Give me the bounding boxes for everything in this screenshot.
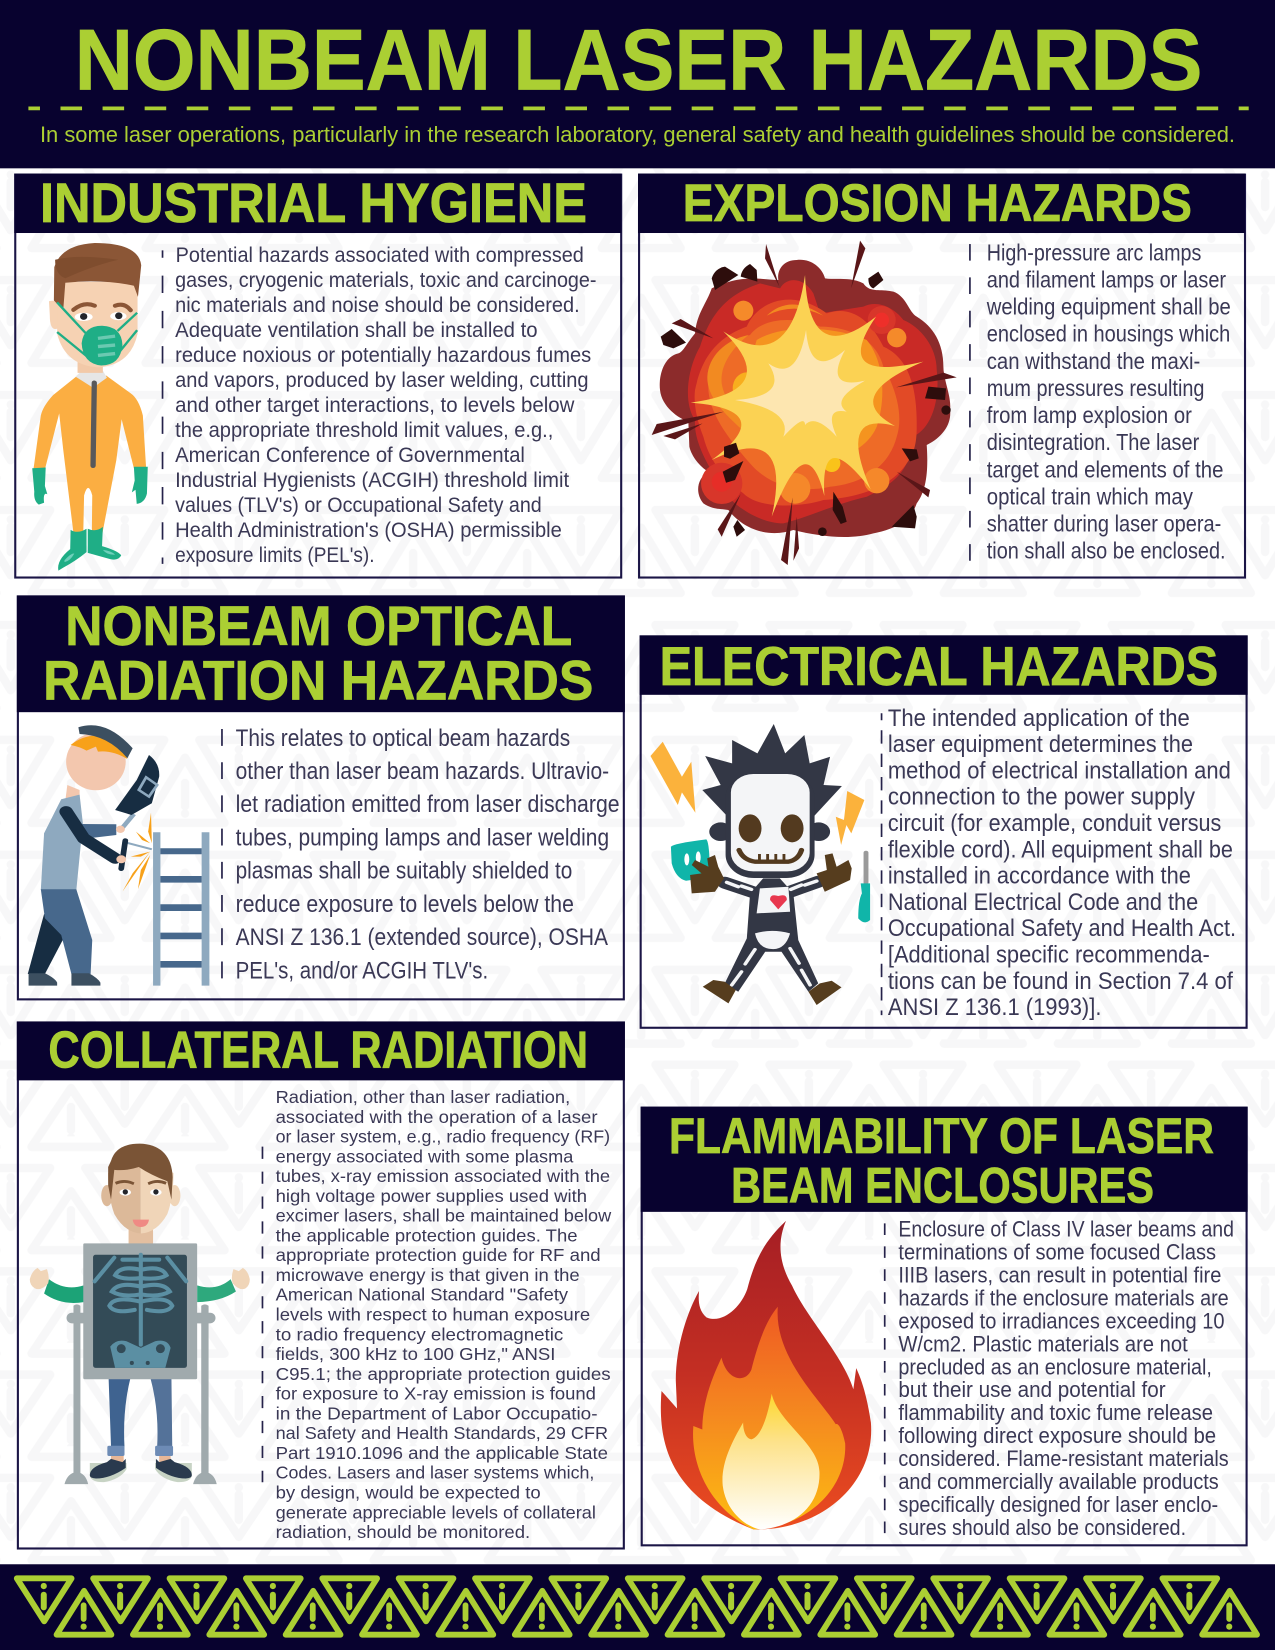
body text: Industrial Hygienists (ACGIH) threshold limit xyxy=(175,467,569,492)
panel: nonbeam optical radiation hazards xyxy=(17,595,625,999)
panel: flammability of laser beam enclosures xyxy=(641,1107,1248,1545)
body text: Codes. Lasers and laser systems which, xyxy=(276,1463,594,1483)
body text: reduce noxious or potentially hazardous fumes xyxy=(175,342,591,367)
body text: plasmas shall be suitably shielded to xyxy=(236,858,572,885)
body text: other than laser beam hazards. Ultravio- xyxy=(236,758,609,785)
heading: electrical hazards: ELECTRICAL HAZARDS xyxy=(660,635,1218,697)
body text: American Conference of Governmental xyxy=(175,442,525,467)
body text: [Additional specific recommenda- xyxy=(888,942,1210,969)
body text: installed in accordance with the xyxy=(888,863,1191,890)
body text: disintegration. The laser xyxy=(987,429,1200,455)
body text: and vapors, produced by laser welding, cutting xyxy=(175,367,589,392)
body text: mum pressures resulting xyxy=(987,375,1205,401)
footer band with warning triangles xyxy=(0,1564,1275,1650)
icon: person behind x-ray screen xyxy=(30,1144,250,1484)
body text: Potential hazards associated with compressed xyxy=(176,242,584,267)
icon: flame xyxy=(661,1221,871,1529)
heading: explosion hazards: EXPLOSION HAZARDS xyxy=(683,174,1192,233)
body text: hazards if the enclosure materials are xyxy=(898,1285,1229,1310)
body text: high voltage power supplies used with xyxy=(276,1186,587,1206)
body text: by design, would be expected to xyxy=(276,1483,541,1503)
body text: to radio frequency electromagnetic xyxy=(276,1324,563,1344)
body text: PEL's, and/or ACGIH TLV's. xyxy=(236,957,488,984)
body text: welding equipment shall be xyxy=(986,294,1231,320)
divider dashes xyxy=(261,1147,263,1482)
heading: flammability of laser beam enclosures xyxy=(669,1107,1214,1213)
heading: collateral radiation: COLLATERAL RADIATION xyxy=(48,1021,588,1079)
body text xyxy=(175,242,596,567)
panel: industrial hygiene xyxy=(14,172,621,578)
body text: radiation, should be monitored. xyxy=(276,1522,530,1542)
body text: associated with the operation of a laser xyxy=(276,1107,598,1127)
body text: circuit (for example, conduit versus xyxy=(888,810,1221,837)
body text: Health Administration's (OSHA) permissible xyxy=(175,517,562,542)
divider dashes xyxy=(162,250,164,564)
body text: the applicable protection guides. The xyxy=(276,1225,578,1245)
body text: tubes, pumping lamps and laser welding xyxy=(236,824,609,851)
body text: Occupational Safety and Health Act. xyxy=(888,915,1236,942)
heading: flammability of laser beam enclosures: BEAM ENCLOSURES xyxy=(731,1156,1154,1213)
heading: nonbeam optical radiation hazards: RADIATION HAZARDS xyxy=(43,650,593,712)
body text: ANSI Z 136.1 (1993)]. xyxy=(888,994,1101,1021)
body text: connection to the power supply xyxy=(888,784,1196,811)
body text: energy associated with some plasma xyxy=(276,1146,573,1166)
body text: enclosed in housings which xyxy=(987,321,1230,347)
body text: but their use and potential for xyxy=(898,1377,1166,1402)
body text: appropriate protection guide for RF and xyxy=(276,1245,601,1265)
body text: nal Safety and Health Standards, 29 CFR xyxy=(276,1423,608,1443)
title: NONBEAM LASER HAZARDS xyxy=(75,12,1202,108)
body text: American National Standard "Safety xyxy=(276,1285,568,1305)
body text xyxy=(986,239,1231,564)
divider dashes xyxy=(221,729,223,978)
panel: electrical hazards xyxy=(640,635,1248,1028)
body text: flexible cord). All equipment shall be xyxy=(888,836,1233,863)
body text: W/cm2. Plastic materials are not xyxy=(898,1331,1188,1356)
body text: values (TLV's) or Occupational Safety and xyxy=(175,492,542,517)
body text: or laser system, e.g., radio frequency (RF) xyxy=(276,1127,610,1147)
body text: excimer lasers, shall be maintained below xyxy=(276,1206,611,1226)
header banner xyxy=(0,0,1275,168)
body text: can withstand the maxi- xyxy=(987,348,1200,374)
body text: exposure limits (PEL's). xyxy=(175,542,375,567)
body text: considered. Flame-resistant materials xyxy=(898,1446,1229,1471)
icon: explosion xyxy=(652,241,957,565)
body text: in the Department of Labor Occupatio- xyxy=(276,1403,598,1423)
divider dashes xyxy=(969,244,971,562)
body text: method of electrical installation and xyxy=(888,757,1231,784)
body text: following direct exposure should be xyxy=(898,1423,1216,1448)
icon: worker in protective suit and mask xyxy=(32,243,148,571)
body text: terminations of some focused Class xyxy=(898,1240,1216,1265)
body text: C95.1; the appropriate protection guides xyxy=(276,1364,611,1384)
body text: Enclosure of Class IV laser beams and xyxy=(898,1217,1234,1242)
body text: reduce exposure to levels below the xyxy=(236,891,574,918)
body text: nic materials and noise should be considered. xyxy=(175,292,580,317)
subtitle: In some laser operations, particularly in the research laboratory, general safety and health guidelines should be considered. xyxy=(40,122,1235,147)
body text: High-pressure arc lamps xyxy=(987,239,1201,265)
body text: flammability and toxic fume release xyxy=(898,1400,1213,1425)
body text: Radiation, other than laser radiation, xyxy=(276,1087,570,1107)
body text: The intended application of the xyxy=(888,705,1190,732)
body text: and commercially available products xyxy=(898,1469,1219,1494)
body text xyxy=(898,1217,1234,1540)
body text: microwave energy is that given in the xyxy=(276,1265,580,1285)
body text: shatter during laser opera- xyxy=(987,510,1221,536)
panel: explosion hazards xyxy=(638,174,1245,578)
heading: nonbeam optical radiation hazards xyxy=(43,595,593,712)
body text: let radiation emitted from laser discharge xyxy=(236,791,620,818)
body text: levels with respect to human exposure xyxy=(276,1305,590,1325)
body text: target and elements of the xyxy=(987,456,1223,482)
heading: nonbeam optical radiation hazards: NONBEAM OPTICAL xyxy=(65,595,572,657)
body text xyxy=(236,725,620,984)
icon: welder at a ladder xyxy=(28,725,209,986)
divider dashes xyxy=(884,1223,886,1535)
body text: and filament lamps or laser xyxy=(987,267,1226,293)
body text: laser equipment determines the xyxy=(888,731,1193,758)
body text: for exposure to X-ray emission is found xyxy=(276,1384,596,1404)
body text: optical train which may xyxy=(987,483,1193,509)
body text: Part 1910.1096 and the applicable State xyxy=(276,1443,608,1463)
body text: the appropriate threshold limit values, e.g., xyxy=(175,417,553,442)
body text: Adequate ventilation shall be installed to xyxy=(175,317,538,342)
body text: and other target interactions, to levels below xyxy=(175,392,575,417)
body text: generate appreciable levels of collateral xyxy=(276,1502,596,1522)
body text: IIIB lasers, can result in potential fire xyxy=(898,1263,1221,1288)
body text: specifically designed for laser enclo- xyxy=(898,1492,1218,1517)
heading: industrial hygiene: INDUSTRIAL HYGIENE xyxy=(40,172,587,234)
icon: electrocuted skeleton xyxy=(650,724,870,1005)
body text: sures should also be considered. xyxy=(898,1515,1186,1540)
panel: collateral radiation xyxy=(17,1021,625,1548)
body text: precluded as an enclosure material, xyxy=(898,1354,1212,1379)
body text xyxy=(276,1087,611,1542)
body text: National Electrical Code and the xyxy=(888,889,1198,916)
body text: exposed to irradiances exceeding 10 xyxy=(898,1308,1225,1333)
body text: ANSI Z 136.1 (extended source), OSHA xyxy=(236,924,609,951)
body text: tubes, x-ray emission associated with the xyxy=(276,1166,610,1186)
body text: from lamp explosion or xyxy=(987,402,1192,428)
body text: This relates to optical beam hazards xyxy=(236,725,570,752)
divider dashes xyxy=(881,713,883,1015)
body text xyxy=(888,705,1236,1021)
body text: tion shall also be enclosed. xyxy=(987,538,1226,564)
body text: gases, cryogenic materials, toxic and carcinoge- xyxy=(175,267,596,292)
body text: tions can be found in Section 7.4 of xyxy=(888,968,1233,995)
body text: fields, 300 kHz to 100 GHz," ANSI xyxy=(276,1344,555,1364)
